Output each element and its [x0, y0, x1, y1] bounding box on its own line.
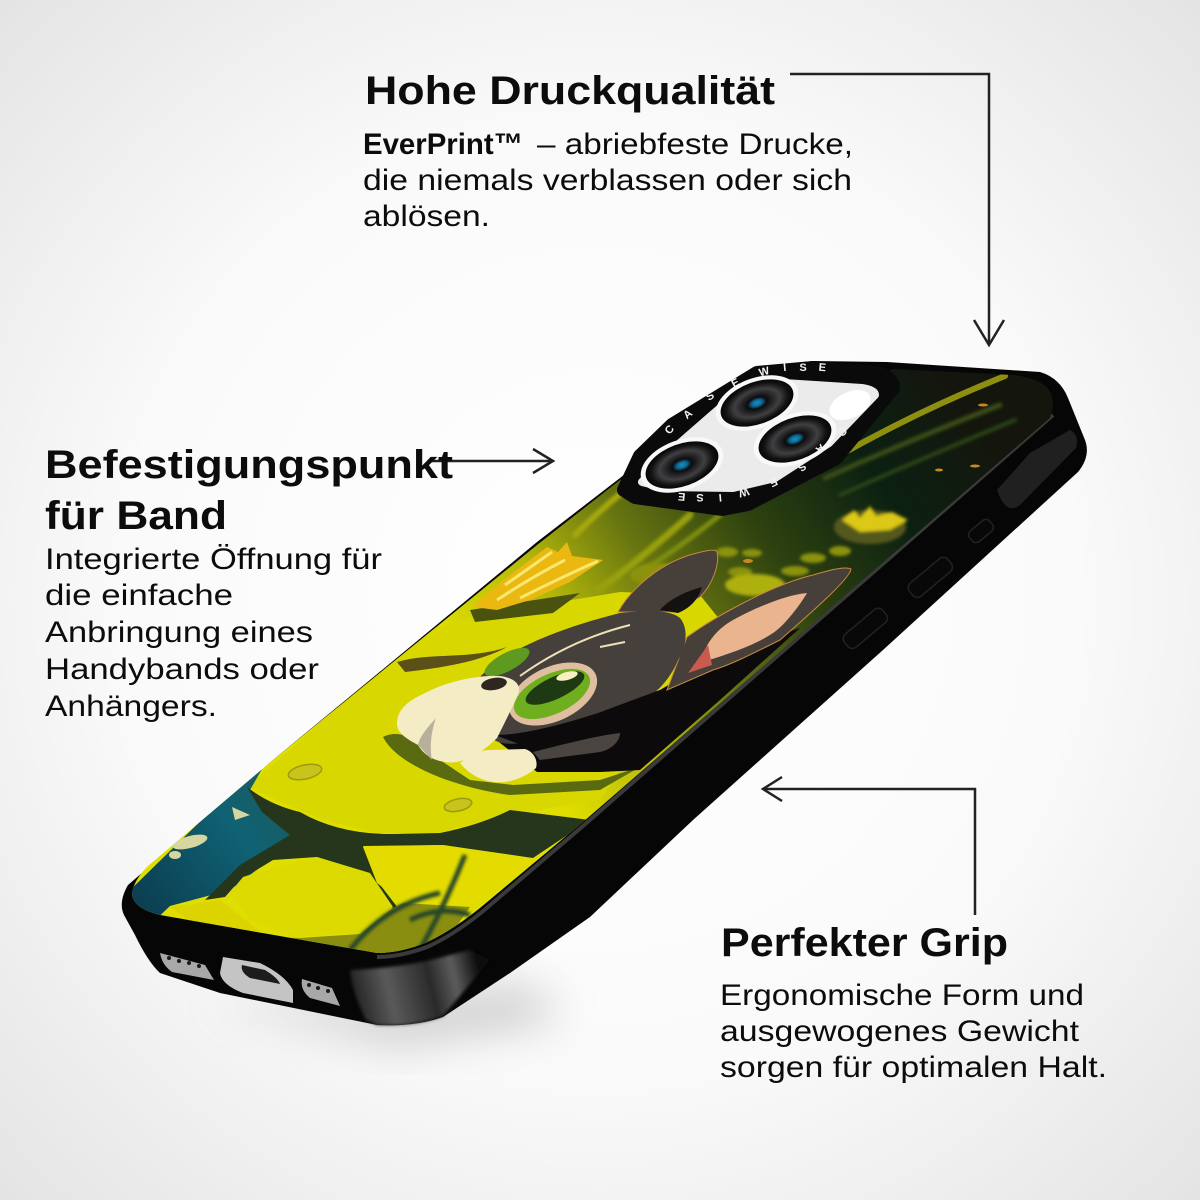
- brand ring text: A: [681, 408, 695, 422]
- heading: strap attachment: Befestigungspunkt: [45, 443, 453, 487]
- lower leaf B: [363, 845, 454, 887]
- muzzle shading: [418, 718, 436, 760]
- strap slot: [997, 430, 1077, 508]
- flash: [825, 384, 875, 426]
- brand ring text: [663, 362, 849, 503]
- right ear: [667, 568, 851, 690]
- inner ear red: [688, 645, 712, 673]
- left ear inner: [660, 587, 702, 613]
- brand ring text: I: [783, 362, 787, 374]
- text: grip: sorgen für optimalen Halt.: [720, 1051, 1107, 1084]
- grass blades: [575, 376, 1015, 590]
- brand ring text: E: [678, 490, 686, 502]
- dog: [383, 550, 851, 795]
- text: strap attachment: Integrierte Öffnung für: [45, 543, 382, 576]
- head dark fold: [495, 690, 660, 748]
- lower dark area: [288, 903, 470, 953]
- muzzle: [397, 676, 519, 763]
- text: strap attachment: Anhängers.: [45, 690, 217, 723]
- lower leaf C: [170, 900, 262, 933]
- brand ring text: E: [767, 475, 779, 489]
- brand ring text: A: [813, 441, 827, 455]
- text: print quality: [363, 128, 853, 233]
- branch shadow: [397, 647, 507, 672]
- brand ring text: E: [730, 376, 742, 390]
- brand ring text: S: [704, 390, 717, 404]
- brand ring text: E: [818, 362, 826, 374]
- right speaker: [302, 979, 340, 1006]
- corner highlight: [350, 950, 490, 1025]
- side buttons: [841, 517, 995, 651]
- arrow: strap attachment: [430, 449, 553, 473]
- case body: [122, 361, 1087, 1025]
- text: print quality: ablösen.: [363, 200, 490, 233]
- bottom ports: [160, 953, 340, 1006]
- callout: grip: [720, 921, 1107, 1084]
- text: grip: ausgewogenes Gewicht: [720, 1015, 1080, 1048]
- right ear pink: [700, 593, 807, 663]
- blurred stems: [350, 855, 470, 950]
- far eye: [484, 648, 530, 676]
- water drops: [287, 762, 473, 814]
- distant flower: [834, 506, 908, 544]
- text: grip: [720, 979, 1107, 1084]
- text: strap attachment: Anbringung eines: [45, 616, 313, 649]
- arm: [533, 733, 620, 760]
- dog shadow: [383, 734, 640, 795]
- camera window: [642, 382, 875, 488]
- yellow flower: [470, 542, 603, 622]
- near eye: [510, 662, 598, 726]
- phone shadow: [210, 985, 560, 1045]
- nose: [481, 678, 507, 690]
- teal water: [132, 769, 290, 915]
- arrow: print quality: [790, 74, 1004, 345]
- text: print quality: – abriebfeste Drucke,: [537, 128, 853, 161]
- head: [480, 611, 686, 744]
- text: grip: Ergonomische Form und: [720, 979, 1084, 1012]
- brand ring text: S: [696, 491, 704, 503]
- heading: strap attachment: für Band: [45, 494, 227, 538]
- brand ring text: W: [758, 365, 771, 379]
- text: strap attachment: die einfache: [45, 579, 233, 612]
- text: strap attachment: Handybands oder: [45, 653, 319, 686]
- text: print quality: die niemals verblassen oder sich: [363, 164, 852, 197]
- dog body: [490, 628, 800, 772]
- text: strap attachment: [45, 543, 382, 723]
- brand ring text: W: [737, 485, 750, 499]
- heading: grip: Perfekter Grip: [721, 921, 1008, 965]
- bokeh spots: [630, 546, 851, 596]
- screen rim: [377, 415, 1053, 957]
- water shadow band: [205, 787, 590, 908]
- brand ring text: C: [835, 424, 849, 438]
- lower leaf A: [236, 857, 393, 908]
- artwork: [132, 369, 1053, 953]
- phone case illustration: [100, 340, 1100, 1025]
- lens right: [746, 401, 844, 477]
- bump outer: [624, 368, 893, 509]
- brand ring text: S: [795, 459, 808, 473]
- brand ring text: S: [799, 362, 807, 374]
- arrow: grip: [763, 777, 975, 915]
- art background: [132, 369, 1053, 953]
- right speaker holes: [307, 983, 330, 993]
- heading: strap attachment: [45, 443, 453, 538]
- brand ring text: I: [718, 491, 722, 503]
- heading: print quality: Hohe Druckqualität: [365, 69, 775, 113]
- embers: [743, 404, 988, 563]
- left speaker holes: [167, 956, 201, 968]
- charging port opening: [242, 965, 280, 984]
- lens top: [708, 365, 806, 441]
- brand ring text: C: [663, 423, 677, 437]
- water lights: [169, 807, 250, 859]
- left speaker: [160, 953, 214, 980]
- text: print quality: EverPrint™: [363, 128, 523, 161]
- charging port: [220, 957, 293, 1003]
- callout: strap attachment: [45, 443, 453, 723]
- camera bump: [624, 362, 893, 509]
- lens left: [633, 427, 731, 503]
- callout: print quality: [363, 69, 853, 233]
- head highlight: [520, 625, 630, 676]
- lily pads middle: [347, 592, 718, 795]
- paw: [460, 749, 537, 782]
- left ear: [618, 550, 718, 612]
